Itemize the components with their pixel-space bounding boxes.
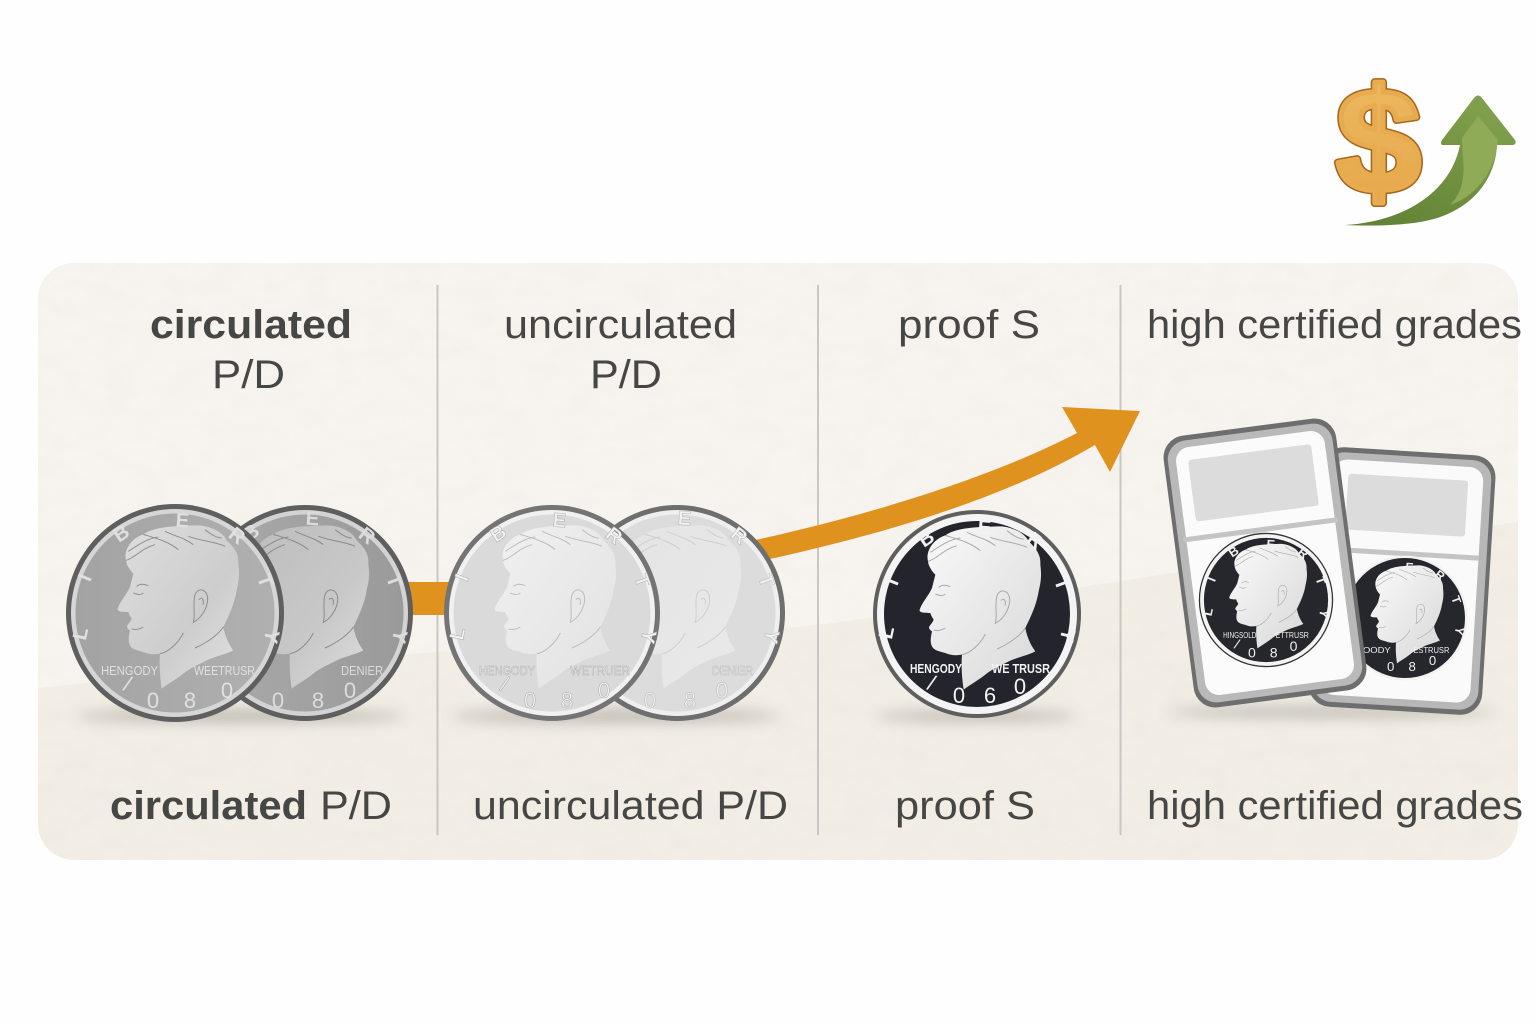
coin: circulated front: / bbox=[120, 671, 136, 697]
coin: circulated rear: DENIER bbox=[341, 663, 383, 678]
certified coin: rear: ESTRUSR bbox=[1413, 646, 1450, 655]
certified coin: front: Y bbox=[1316, 608, 1332, 620]
certified coin: front: ETTRUSR bbox=[1276, 630, 1309, 640]
coin: circulated rear: B bbox=[240, 520, 264, 546]
column heading: high certified grades: high certified grades bbox=[1147, 303, 1522, 347]
label window bbox=[1188, 444, 1319, 522]
coin: uncirculated front: B bbox=[487, 521, 511, 547]
coin: circulated front bbox=[66, 504, 284, 722]
coin: circulated front: T bbox=[252, 571, 277, 590]
certified coin: front bbox=[1199, 533, 1333, 667]
coin: circulated rear: ODY bbox=[245, 663, 267, 678]
coin: proof S: / bbox=[924, 670, 940, 696]
certified coin: front: 0 bbox=[1248, 645, 1256, 661]
coin: circulated front: Y bbox=[258, 627, 283, 646]
bottom label: uncirculated P/D: uncirculated P/D bbox=[473, 784, 788, 828]
column heading: circulated: P/D bbox=[212, 353, 285, 397]
label window bbox=[1345, 474, 1468, 537]
coin: circulated front: B bbox=[110, 521, 134, 547]
certified coin: front: / bbox=[1232, 636, 1242, 652]
coin: proof S: B bbox=[915, 526, 939, 552]
coin: circulated front: 8 bbox=[184, 688, 196, 713]
coin: proof S: L bbox=[875, 624, 899, 641]
coin: uncirculated front: HENGODY bbox=[479, 663, 535, 678]
certified coin: front: 8 bbox=[1270, 645, 1278, 661]
certified slab: front bbox=[1161, 416, 1369, 710]
coin: uncirculated front: I bbox=[451, 571, 474, 584]
coin: uncirculated front: R bbox=[601, 523, 627, 550]
coin: uncirculated front: 0 bbox=[598, 678, 610, 703]
certified coin: front: E bbox=[1266, 537, 1276, 552]
certified coin: rear: OODY bbox=[1363, 646, 1392, 655]
coin: proof S: R bbox=[1022, 528, 1048, 555]
coin: uncirculated front: WETRUER bbox=[570, 663, 630, 678]
column heading: uncirculated: P/D bbox=[590, 353, 662, 397]
coin: proof S: 6 bbox=[984, 683, 996, 708]
certified coin: front: HINGSOLD bbox=[1223, 630, 1256, 640]
coin: proof S bbox=[873, 510, 1081, 718]
coin: circulated rear: 0 bbox=[272, 688, 284, 713]
coin: circulated front: L bbox=[69, 625, 93, 642]
column heading: circulated: circulated bbox=[150, 303, 352, 347]
coin: uncirculated front: 0 bbox=[524, 688, 536, 713]
column heading: uncirculated: uncirculated bbox=[504, 303, 737, 347]
coin: uncirculated rear: 0 bbox=[644, 688, 656, 713]
coin: circulated front: HENGODY bbox=[101, 663, 158, 678]
coin: proof S: HENGODY bbox=[910, 661, 962, 676]
column heading: proof S: proof S bbox=[898, 303, 1040, 347]
coin: circulated front: 0 bbox=[221, 678, 233, 703]
column heading: circulated bbox=[150, 303, 352, 397]
coin: circulated rear bbox=[197, 505, 413, 721]
coin: uncirculated rear bbox=[569, 505, 785, 721]
certified coin: front: 0 bbox=[1290, 638, 1298, 654]
coin: proof S: T bbox=[1049, 574, 1074, 593]
coin: circulated rear: L bbox=[199, 621, 223, 638]
coin: uncirculated front: Y bbox=[635, 627, 660, 646]
bottom label: proof S: proof S bbox=[895, 784, 1035, 828]
dividers bbox=[438, 285, 1120, 835]
coin: uncirculated rear: T bbox=[753, 571, 778, 590]
column heading: uncirculated bbox=[504, 303, 737, 397]
coin: uncirculated front: L bbox=[446, 625, 470, 642]
coin: proof S: 0 bbox=[1014, 674, 1026, 699]
coin: circulated rear: Y bbox=[386, 627, 411, 646]
bottom label: circulated P/D: circulated bbox=[110, 784, 307, 828]
coin: circulated rear: R bbox=[354, 523, 380, 550]
bottom label: circulated P/D bbox=[110, 784, 392, 828]
certified coin: rear: R bbox=[1432, 567, 1448, 584]
coin: uncirculated front: E bbox=[552, 510, 567, 532]
certified coin: rear: T bbox=[1448, 594, 1464, 606]
bottom label: high certified grades: high certified grades bbox=[1147, 784, 1523, 828]
certified coin: front: B bbox=[1225, 543, 1241, 560]
certified slab: rear bbox=[1307, 446, 1497, 716]
coin: circulated front: 0 bbox=[147, 688, 159, 713]
coin: circulated front: E bbox=[175, 510, 190, 532]
certified coin: front: T bbox=[1312, 574, 1329, 587]
growth arrow bbox=[400, 407, 1140, 615]
coin: uncirculated rear: R bbox=[726, 523, 752, 550]
certified coin: rear: 8 bbox=[1409, 659, 1416, 674]
coin: uncirculated rear: DENIER bbox=[712, 663, 753, 678]
coin: uncirculated front: / bbox=[497, 671, 513, 697]
certified coin: rear: E bbox=[1405, 560, 1414, 574]
certified coin: rear bbox=[1343, 556, 1467, 680]
coin: uncirculated front: T bbox=[629, 571, 654, 590]
coin: circulated front: I bbox=[74, 571, 97, 584]
coin: proof S: Y bbox=[1054, 626, 1079, 645]
coin: uncirculated front bbox=[444, 505, 660, 721]
coin: proof S: I bbox=[881, 575, 904, 588]
certified coin: front: L bbox=[1200, 606, 1216, 617]
coin: proof S: E bbox=[977, 517, 992, 539]
icon: green rising arrow bbox=[1345, 96, 1516, 226]
coin: circulated rear: 8 bbox=[312, 688, 324, 713]
certified coin: rear: Y bbox=[1452, 625, 1467, 636]
coin: circulated rear: 0 bbox=[344, 678, 356, 703]
coin: proof S: 0 bbox=[953, 683, 965, 708]
panel: background card bbox=[38, 263, 1518, 860]
bottom label: circulated P/D: P/D bbox=[320, 784, 392, 828]
certified coin: rear: 0 bbox=[1429, 653, 1436, 668]
coin: uncirculated rear: 8 bbox=[684, 688, 696, 713]
icon: dollar sign: $ bbox=[1336, 59, 1421, 224]
coin: circulated rear: T bbox=[381, 571, 406, 590]
coin: proof S: WE TRUSR bbox=[992, 661, 1050, 676]
certified coin: rear: 0 bbox=[1387, 659, 1394, 674]
coin: uncirculated rear: 0 bbox=[716, 678, 728, 703]
certified coin: front: R bbox=[1295, 544, 1312, 562]
coin: uncirculated rear: E bbox=[677, 508, 692, 530]
certified coin: front: I bbox=[1204, 575, 1219, 584]
coin: uncirculated rear: Y bbox=[758, 627, 783, 646]
coin: uncirculated front: 8 bbox=[561, 688, 573, 713]
coin: circulated rear: E bbox=[305, 508, 320, 530]
coin: circulated front: WEETRUSR bbox=[194, 663, 255, 678]
icon: dollar sign: $ bbox=[1336, 59, 1421, 224]
coin shadows bbox=[75, 707, 1495, 722]
coin: circulated front: R bbox=[224, 523, 250, 550]
